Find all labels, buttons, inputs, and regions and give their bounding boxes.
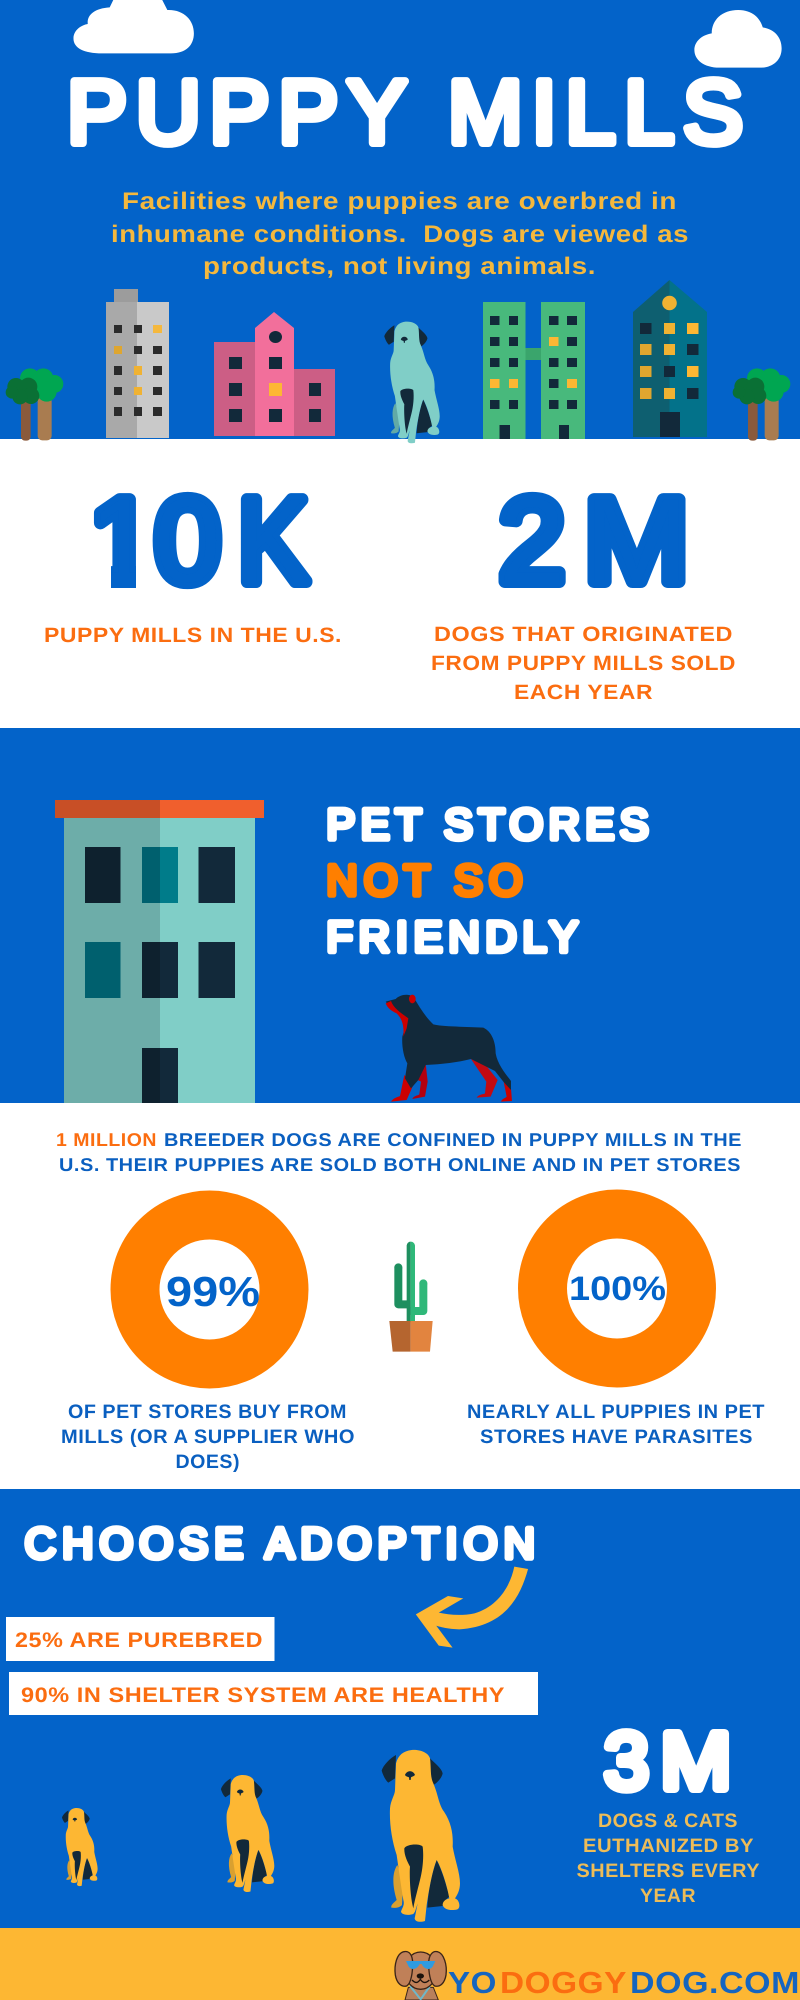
- stat: 10K: 1: [89, 474, 155, 608]
- icon: medium yellow dog: [221, 1775, 274, 1892]
- donut value: 100%: 100%: [569, 1270, 666, 1308]
- icon: large yellow dog: [382, 1750, 460, 1922]
- icon: cloud left: [73, 0, 194, 53]
- caption: nearly all puppies have parasites: [467, 1401, 765, 1448]
- callout: 90% healthy: 90% IN SHELTER SYSTEM ARE HEALTHY: [21, 1684, 505, 1707]
- icon: pet store building: [55, 800, 264, 1103]
- caption: dogs originated: EACH YEAR: [514, 681, 653, 704]
- arrow: curved yellow: [416, 1567, 528, 1648]
- stat: 3M: M: [661, 1716, 731, 1806]
- text: 1 million breeder dogs: U.S. THEIR PUPPIES ARE SOLD BOTH ONLINE AND IN PET STORES: [59, 1154, 741, 1175]
- logo text: yodoggydog.com: DOGGY: [500, 1966, 627, 2000]
- subtitle text: Facilities where puppies are overbred in: [122, 188, 677, 215]
- caption: dogs and cats euthanized: SHELTERS EVERY: [576, 1860, 760, 1882]
- caption: dogs originated: DOGS THAT ORIGINATED: [434, 623, 733, 646]
- heading: choose adoption: CHOOSE ADOPTION: [25, 1520, 535, 1568]
- stat: 3M: 3: [604, 1716, 649, 1806]
- subtitle text: inhumane conditions. Dogs are viewed as: [111, 221, 689, 248]
- text: 1 million breeder dogs: BREEDER DOGS ARE CONFINED IN PUPPY MILLS IN THE: [164, 1129, 742, 1150]
- panel: choose adoption: [0, 1489, 800, 1929]
- caption: dogs originated: FROM PUPPY MILLS SOLD: [431, 652, 736, 675]
- panel: header with city skyline: [0, 0, 800, 443]
- subtitle text: products, not living animals.: [203, 253, 596, 280]
- heading: pet stores not so friendly: PET STORES: [326, 801, 648, 849]
- callout: 25% are purebred: [6, 1617, 274, 1661]
- donut value: 99%: 99%: [166, 1268, 260, 1315]
- caption: dogs and cats euthanized: DOGS & CATS: [598, 1810, 738, 1832]
- icon: teal sitting dog: [384, 322, 440, 443]
- icon: trees left: [6, 368, 63, 441]
- callout: 25% are purebred: 25% ARE PUREBRED: [15, 1629, 263, 1652]
- heading: pet stores not so friendly: NOT SO: [326, 857, 522, 905]
- text: 1 million breeder dogs: [56, 1129, 742, 1175]
- caption: dogs and cats euthanized: EUTHANIZED BY: [583, 1835, 754, 1857]
- chart: 100% donut: [542, 1214, 692, 1363]
- stat: 2M: [499, 474, 689, 608]
- panel: footer: [0, 1928, 800, 2000]
- subtitle text: [111, 188, 689, 280]
- panel: breeder dogs and donut stats: [0, 1103, 800, 1489]
- stat: 2M: M: [584, 474, 689, 608]
- caption: of pet stores buy from mills: OF PET STORES BUY FROM: [68, 1401, 347, 1423]
- caption: puppy mills in the U.S.: PUPPY MILLS IN THE U.S.: [44, 624, 342, 647]
- heading: pet stores not so friendly: [326, 801, 648, 962]
- caption: of pet stores buy from mills: [61, 1401, 355, 1473]
- title: PUPPY MILLS: [67, 63, 743, 163]
- icon: standing rottweiler: [386, 995, 512, 1102]
- logo text: yodoggydog.com: [448, 1966, 800, 2000]
- caption: dogs and cats euthanized: YEAR: [640, 1885, 696, 1907]
- caption: of pet stores buy from mills: MILLS (OR A SUPPLIER WHO: [61, 1426, 355, 1448]
- logo text: yodoggydog.com: YO: [448, 1966, 497, 2000]
- panel: pet stores: [0, 728, 800, 1103]
- icon: grey tower building: [106, 289, 169, 438]
- stat: 10K: 0: [154, 474, 221, 608]
- stat: 10K: K: [238, 474, 308, 608]
- icon: pink building: [214, 312, 335, 436]
- icon: small yellow dog: [62, 1808, 98, 1886]
- heading: pet stores not so friendly: FRIENDLY: [326, 914, 578, 962]
- caption: of pet stores buy from mills: DOES): [176, 1451, 240, 1473]
- text: 1 million breeder dogs: 1 MILLION: [56, 1129, 157, 1150]
- icon: dark teal gabled building: [633, 280, 707, 437]
- callout: 90% healthy: [9, 1672, 538, 1715]
- caption: nearly all puppies have parasites: STORES HAVE PARASITES: [480, 1426, 753, 1448]
- panel: key statistics: [0, 439, 800, 728]
- caption: dogs and cats euthanized: [576, 1810, 760, 1907]
- icon: cloud right: [694, 10, 782, 68]
- caption: nearly all puppies have parasites: NEARLY ALL PUPPIES IN PET: [467, 1401, 765, 1423]
- icon: cactus in pot: [389, 1242, 433, 1352]
- icon: trees right: [733, 368, 790, 441]
- stat: 3M: [604, 1716, 731, 1806]
- icon: dog logo with sunglasses: [395, 1952, 446, 2000]
- icon: green twin tower building: [483, 302, 585, 439]
- stat: 2M: 2: [499, 474, 565, 608]
- stat: 10K: [82, 474, 308, 608]
- logo text: yodoggydog.com: DOG.COM: [630, 1966, 800, 2000]
- caption: dogs originated: [431, 623, 736, 704]
- chart: 99% donut: [135, 1215, 284, 1364]
